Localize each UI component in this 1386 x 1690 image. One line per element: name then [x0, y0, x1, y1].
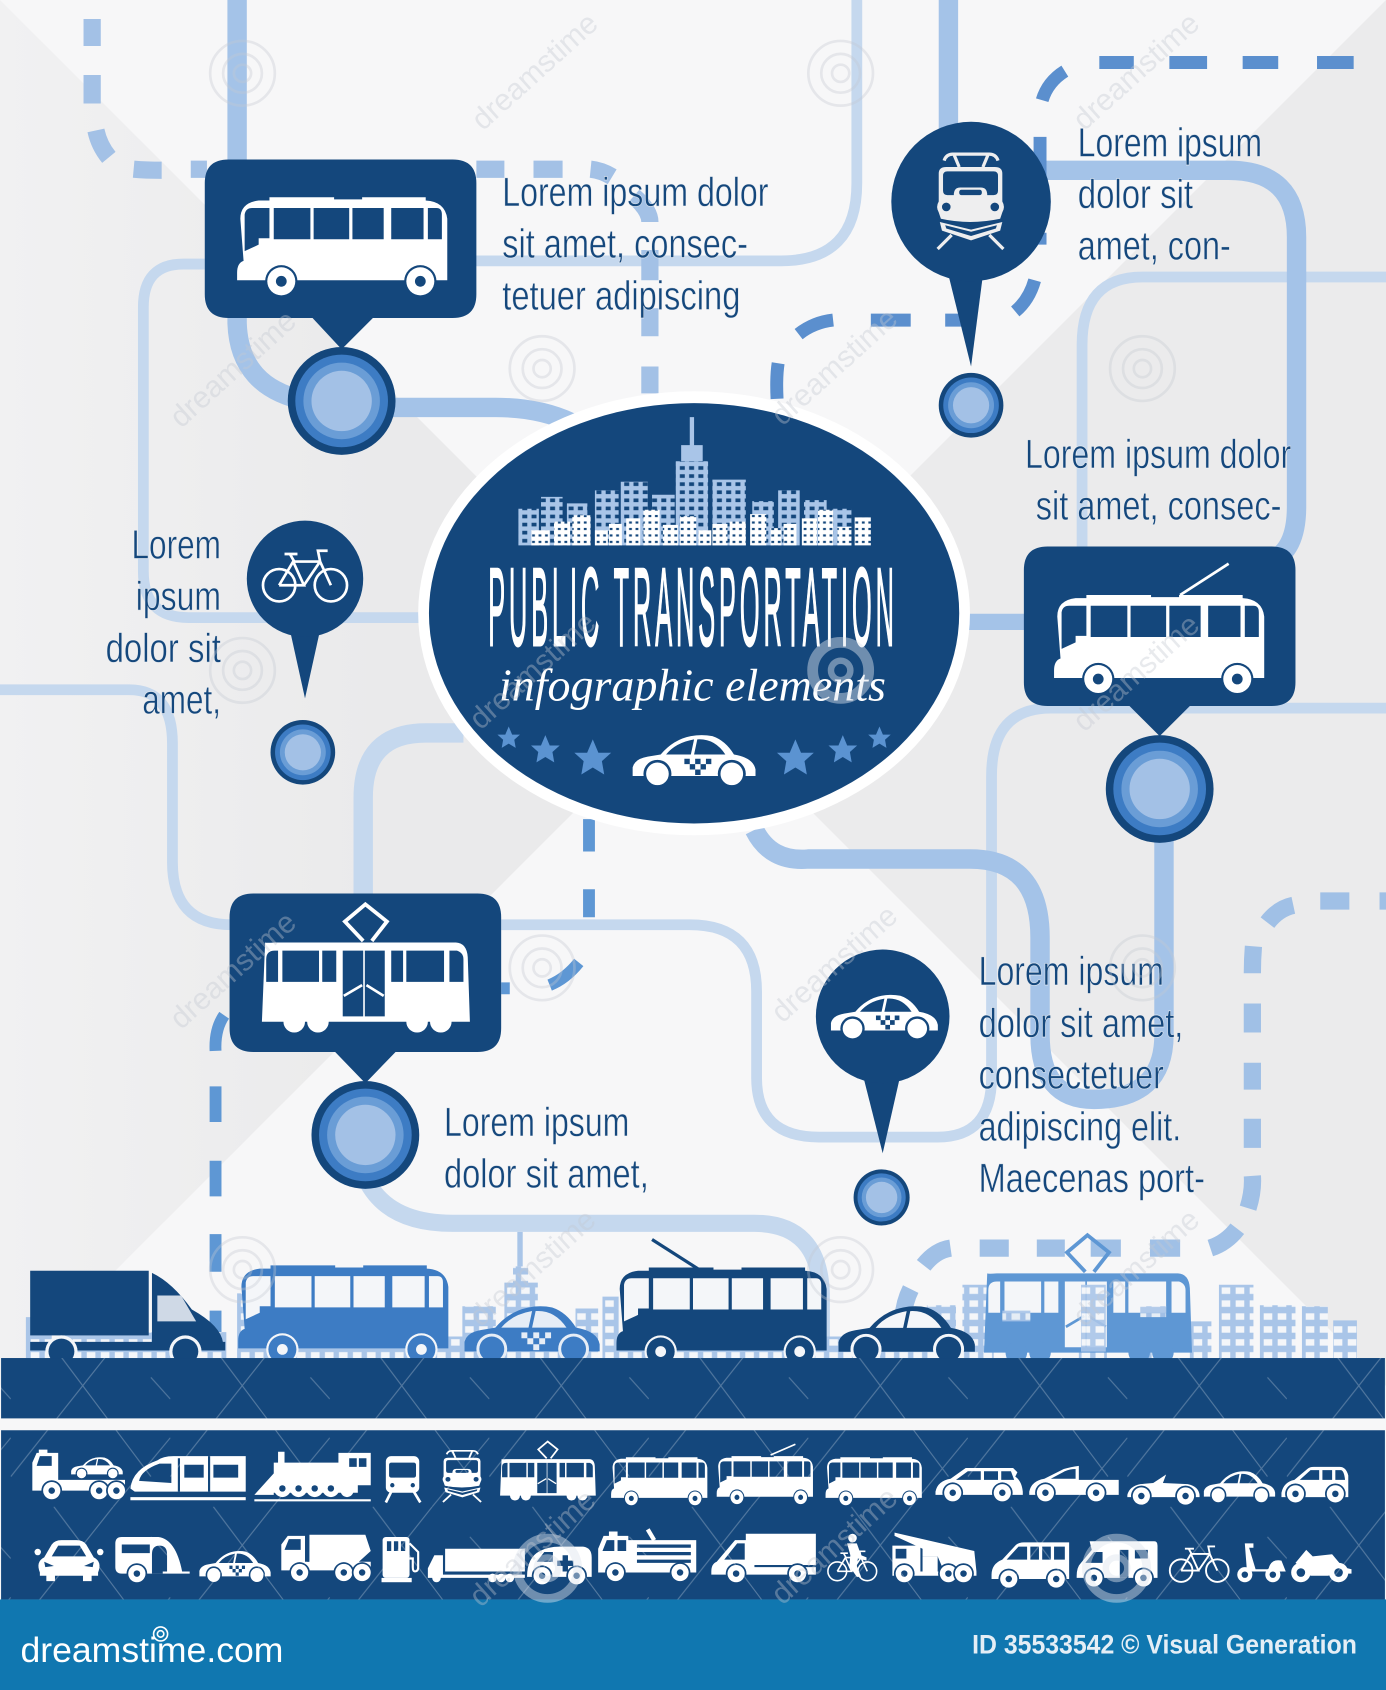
- dump truck: [281, 1534, 372, 1583]
- watermark: dreamstime: [164, 906, 303, 1036]
- tram callout: [230, 894, 501, 1083]
- text: right: sit amet, consec-: [1036, 483, 1281, 529]
- watermark: dreamstime: [1067, 1203, 1206, 1333]
- watermark: dreamstime: [1067, 7, 1206, 137]
- watermark: dreamstime: [463, 1203, 602, 1333]
- text: top right: [1078, 119, 1262, 269]
- bicycle pin: [247, 521, 363, 698]
- vehicle icon panel: [1, 1430, 1385, 1599]
- text: lower left: [444, 1099, 649, 1197]
- icon: train: [937, 154, 1004, 249]
- tram front: [443, 1451, 481, 1502]
- watermark: dreamstime: [463, 606, 602, 736]
- minibus: [992, 1542, 1069, 1589]
- train node: [939, 373, 1003, 438]
- text: lower left: Lorem ipsum: [444, 1099, 629, 1145]
- long truck: [428, 1549, 525, 1582]
- text: lower right: Lorem ipsum: [979, 948, 1164, 994]
- tram side: [500, 1442, 596, 1501]
- trolleybus: [616, 1239, 827, 1368]
- caravan: [115, 1537, 190, 1584]
- watermark: dreamstime: [164, 304, 303, 434]
- icon: bicycle: [263, 551, 347, 601]
- text: top left: [502, 169, 768, 318]
- sedan: [1204, 1471, 1275, 1504]
- footer band: [0, 1599, 1386, 1690]
- dashed line: lower left: [215, 819, 589, 1347]
- icon: taxi: [831, 995, 938, 1041]
- dashed line: lower right: [903, 901, 1386, 1317]
- icon: tram: [262, 904, 470, 1033]
- watermark: dreamstime: [765, 1481, 904, 1611]
- minivan: [1281, 1467, 1348, 1504]
- skyline: [518, 417, 871, 545]
- text: lower right: consectetuer: [979, 1052, 1164, 1098]
- text: lower right: dolor sit amet,: [979, 1000, 1183, 1046]
- bicycle: [1170, 1546, 1229, 1582]
- steam locomotive: [254, 1452, 371, 1501]
- trolleybus: [717, 1444, 813, 1505]
- car front: [34, 1540, 103, 1581]
- dreamstime logo: dreamstime.com: [20, 1630, 283, 1670]
- bottom vehicle row: [30, 1235, 1192, 1368]
- text: left: amet,: [142, 677, 221, 723]
- watermark: dreamstime: [1067, 608, 1206, 738]
- wagon: [935, 1468, 1023, 1503]
- watermark: dreamstime: [463, 1483, 602, 1613]
- taxi pin: [816, 950, 950, 1153]
- cyclist: [828, 1534, 877, 1581]
- text: top right: amet, con-: [1078, 223, 1231, 269]
- text: left: ipsum: [136, 573, 221, 619]
- logo spiral: [154, 1627, 168, 1641]
- bus stop node: [288, 347, 396, 455]
- train pin: [891, 122, 1051, 366]
- bullet train: [130, 1456, 246, 1500]
- convertible: [1127, 1474, 1200, 1506]
- text: top right: dolor sit: [1078, 171, 1194, 217]
- tow truck: [32, 1450, 127, 1501]
- scooter: [1237, 1543, 1286, 1582]
- trolleybus callout: [1024, 546, 1295, 736]
- text: top left: tetuer adipiscing: [502, 272, 740, 318]
- text: top left: Lorem ipsum dolor: [502, 169, 768, 215]
- crane truck: [892, 1533, 976, 1584]
- dark car: [838, 1306, 975, 1365]
- road band: [1, 1358, 1385, 1418]
- motorcycle: [1291, 1550, 1352, 1582]
- watermark: dreamstime: [465, 7, 605, 137]
- watermark: dreamstime: [765, 899, 904, 1029]
- icon row 2: [34, 1529, 1352, 1589]
- text: right: [1025, 431, 1291, 529]
- text: left: dolor sit: [106, 625, 221, 671]
- text: top right: Lorem ipsum: [1078, 119, 1262, 165]
- tram: [984, 1235, 1192, 1363]
- text: lower right: Maecenas port-: [979, 1155, 1205, 1201]
- camper: [1077, 1541, 1158, 1588]
- icon: taxi: [633, 735, 756, 788]
- delivery truck: [30, 1271, 225, 1368]
- text: left: [106, 521, 221, 723]
- fire truck: [598, 1529, 696, 1583]
- text: left: Lorem: [131, 521, 221, 567]
- gas pump: [382, 1537, 418, 1582]
- subtitle: infographic elements: [499, 661, 886, 711]
- bus: [826, 1457, 922, 1506]
- text: top left: sit amet, consec-: [502, 221, 748, 267]
- bottom skyline: [26, 1232, 1357, 1358]
- trolleybus node: [1106, 735, 1214, 843]
- blue taxi: [465, 1306, 600, 1364]
- text: lower right: [979, 948, 1205, 1201]
- taxi: [199, 1551, 271, 1584]
- bicycle node: [271, 720, 335, 785]
- metro front: [386, 1456, 420, 1502]
- delivery van: [711, 1534, 816, 1584]
- blue bus: [238, 1265, 448, 1366]
- icon row 1: [32, 1442, 1348, 1506]
- stars: [497, 726, 891, 774]
- text: lower right: adipiscing elit.: [979, 1103, 1181, 1149]
- ambulance: [527, 1547, 592, 1586]
- dashed line: top left: [92, 19, 650, 393]
- taxi node: [854, 1169, 910, 1225]
- bus callout: [205, 160, 476, 349]
- text: right: Lorem ipsum dolor: [1025, 431, 1291, 477]
- icon: trolleybus: [1054, 564, 1264, 695]
- dashed line: top right: [777, 63, 1354, 399]
- text: lower left: dolor sit amet,: [444, 1151, 649, 1197]
- icon: bus: [237, 197, 447, 297]
- watermark: dreamstime: [765, 302, 904, 432]
- tram node: [311, 1081, 419, 1189]
- pickup: [1029, 1466, 1119, 1503]
- central title badge: [418, 391, 970, 835]
- image id credit: ID 35533542 © Visual Generation: [972, 1629, 1357, 1659]
- bus: [611, 1457, 707, 1506]
